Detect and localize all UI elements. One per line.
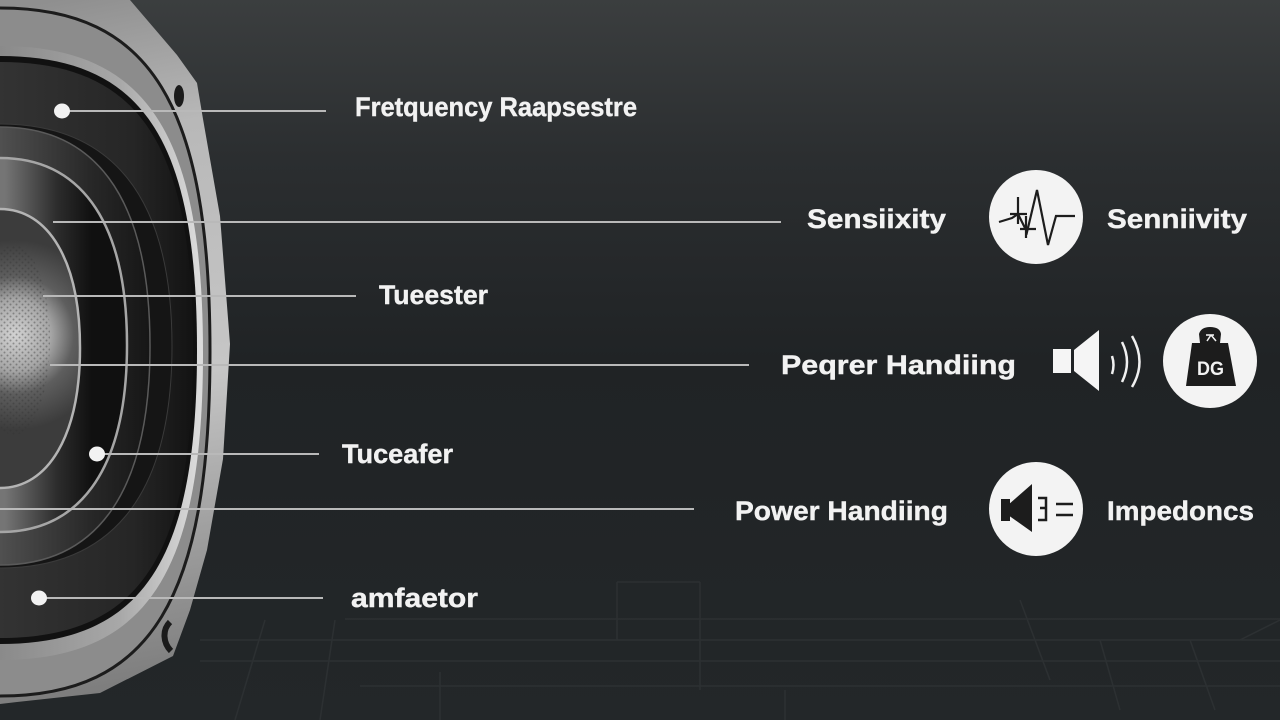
speaker illustration: [0, 0, 230, 704]
floor grid: [200, 582, 1280, 720]
label: power handling lower: Power Handiing: [735, 496, 948, 526]
label: tweeter: Tueester: [379, 280, 488, 310]
callout lines: [0, 111, 781, 598]
dome mesh: [0, 245, 50, 435]
basket: [0, 62, 193, 638]
label: amplifier: amfaetor: [351, 583, 478, 613]
dark rim: [0, 56, 197, 644]
mounting hole bottom: [164, 622, 171, 651]
inner cone: [0, 158, 127, 532]
outer black ring: [0, 8, 210, 696]
label: frequency response: Fretquency Raapsestre: [355, 92, 637, 122]
label: twiter: Tuceafer: [342, 439, 453, 469]
label: sensitivity left: Sensiixity: [807, 204, 946, 234]
icon: impedance: [989, 462, 1083, 556]
label: impedance: Impedoncs: [1107, 496, 1254, 526]
speaker dome: [0, 209, 80, 488]
icon: waveform: [989, 170, 1083, 264]
mounting hole top: [174, 85, 184, 107]
outer cone: [0, 127, 150, 565]
speaker frame: [0, 0, 230, 704]
light ring: [0, 46, 203, 660]
icon: weight: DG: [1197, 359, 1224, 380]
label: power handling upper: Peqrer Handiing: [781, 350, 1016, 380]
icon: weight: [1163, 314, 1257, 408]
label: sensitivity right: Senniivity: [1107, 204, 1247, 234]
icon: speaker with sound waves: [1053, 330, 1140, 391]
callout dots: [31, 104, 105, 606]
